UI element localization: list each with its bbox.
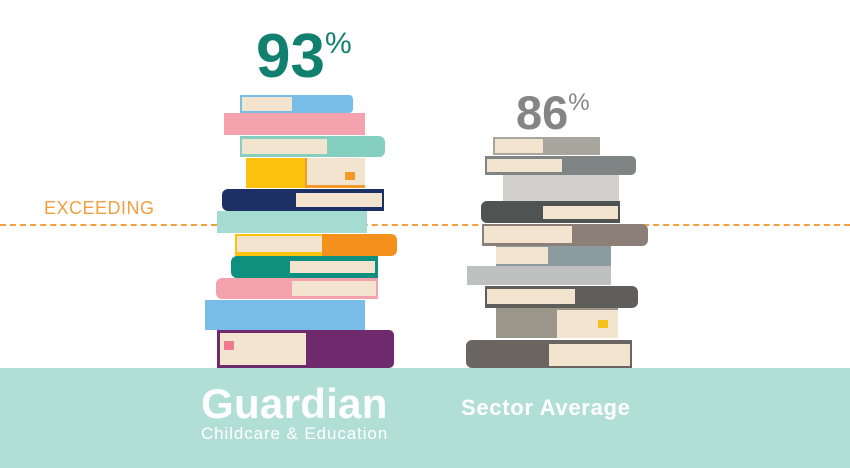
logo: Guardian Childcare & Education: Guardian <box>201 380 388 427</box>
dashed exceeding line <box>0 224 850 226</box>
label: Sector Average: Sector Average <box>461 395 631 420</box>
stack: sector average books <box>466 137 648 368</box>
bottom band <box>0 368 850 468</box>
stack: Guardian books <box>205 95 397 368</box>
heading: 86%: 86% <box>516 86 590 139</box>
label: EXCEEDING: EXCEEDING <box>44 198 155 218</box>
logo: Guardian Childcare & Education: Childcare & Education <box>201 424 388 443</box>
heading: 93%: 93% <box>256 22 352 91</box>
